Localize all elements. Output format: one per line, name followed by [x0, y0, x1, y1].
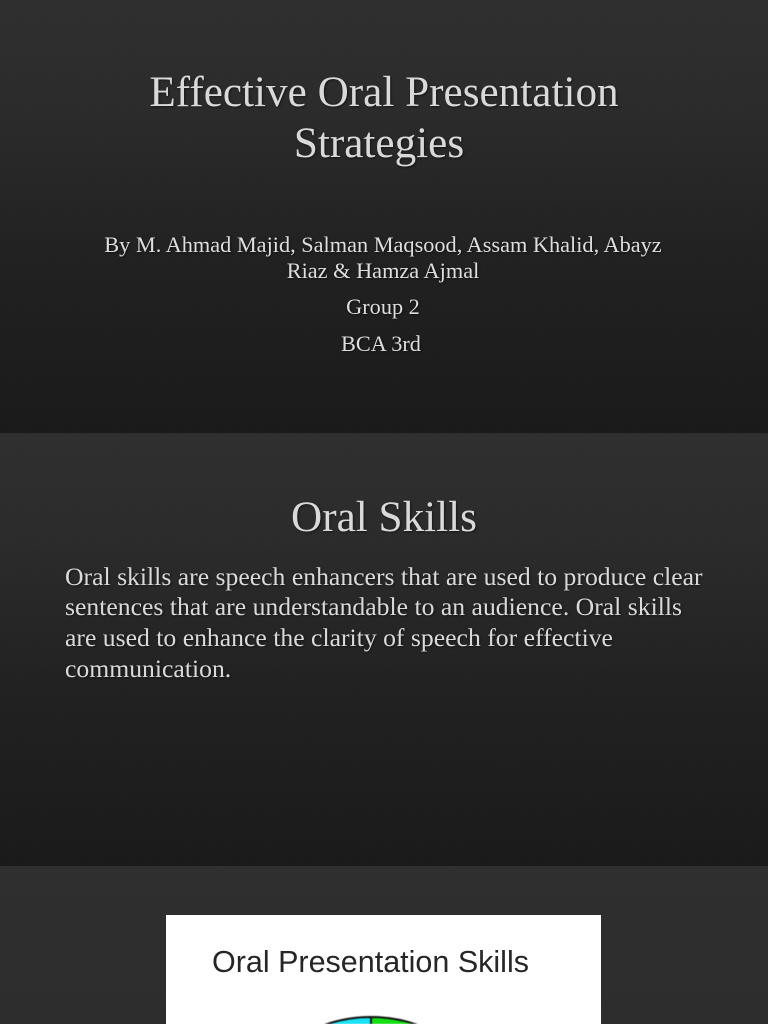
class: BCA 3rd [341, 331, 421, 356]
body text: communication. [65, 654, 231, 683]
pie chart top [324, 1015, 418, 1024]
slide: oral skills [0, 433, 768, 866]
body text: are used to enhance the clarity of speech for effective [65, 623, 613, 652]
body text [65, 562, 703, 683]
authors: Riaz & Hamza Ajmal [287, 258, 479, 283]
authors [104, 232, 662, 283]
figure title: Oral Presentation Skills [212, 945, 529, 979]
title line one: Effective Oral Presentation [149, 69, 619, 116]
slide: title [0, 0, 768, 433]
heading: Oral Skills [291, 494, 477, 541]
group: Group 2 [346, 294, 420, 319]
body text: sentences that are understandable to an audience. Oral skills [65, 592, 682, 621]
figure card [166, 915, 601, 1024]
slide: presentation skills [0, 866, 768, 1024]
title [149, 69, 619, 168]
title line two: Strategies [294, 120, 464, 167]
authors: By M. Ahmad Majid, Salman Maqsood, Assam Khalid, Abayz [104, 232, 662, 257]
body text: Oral skills are speech enhancers that are used to produce clear [65, 562, 703, 590]
